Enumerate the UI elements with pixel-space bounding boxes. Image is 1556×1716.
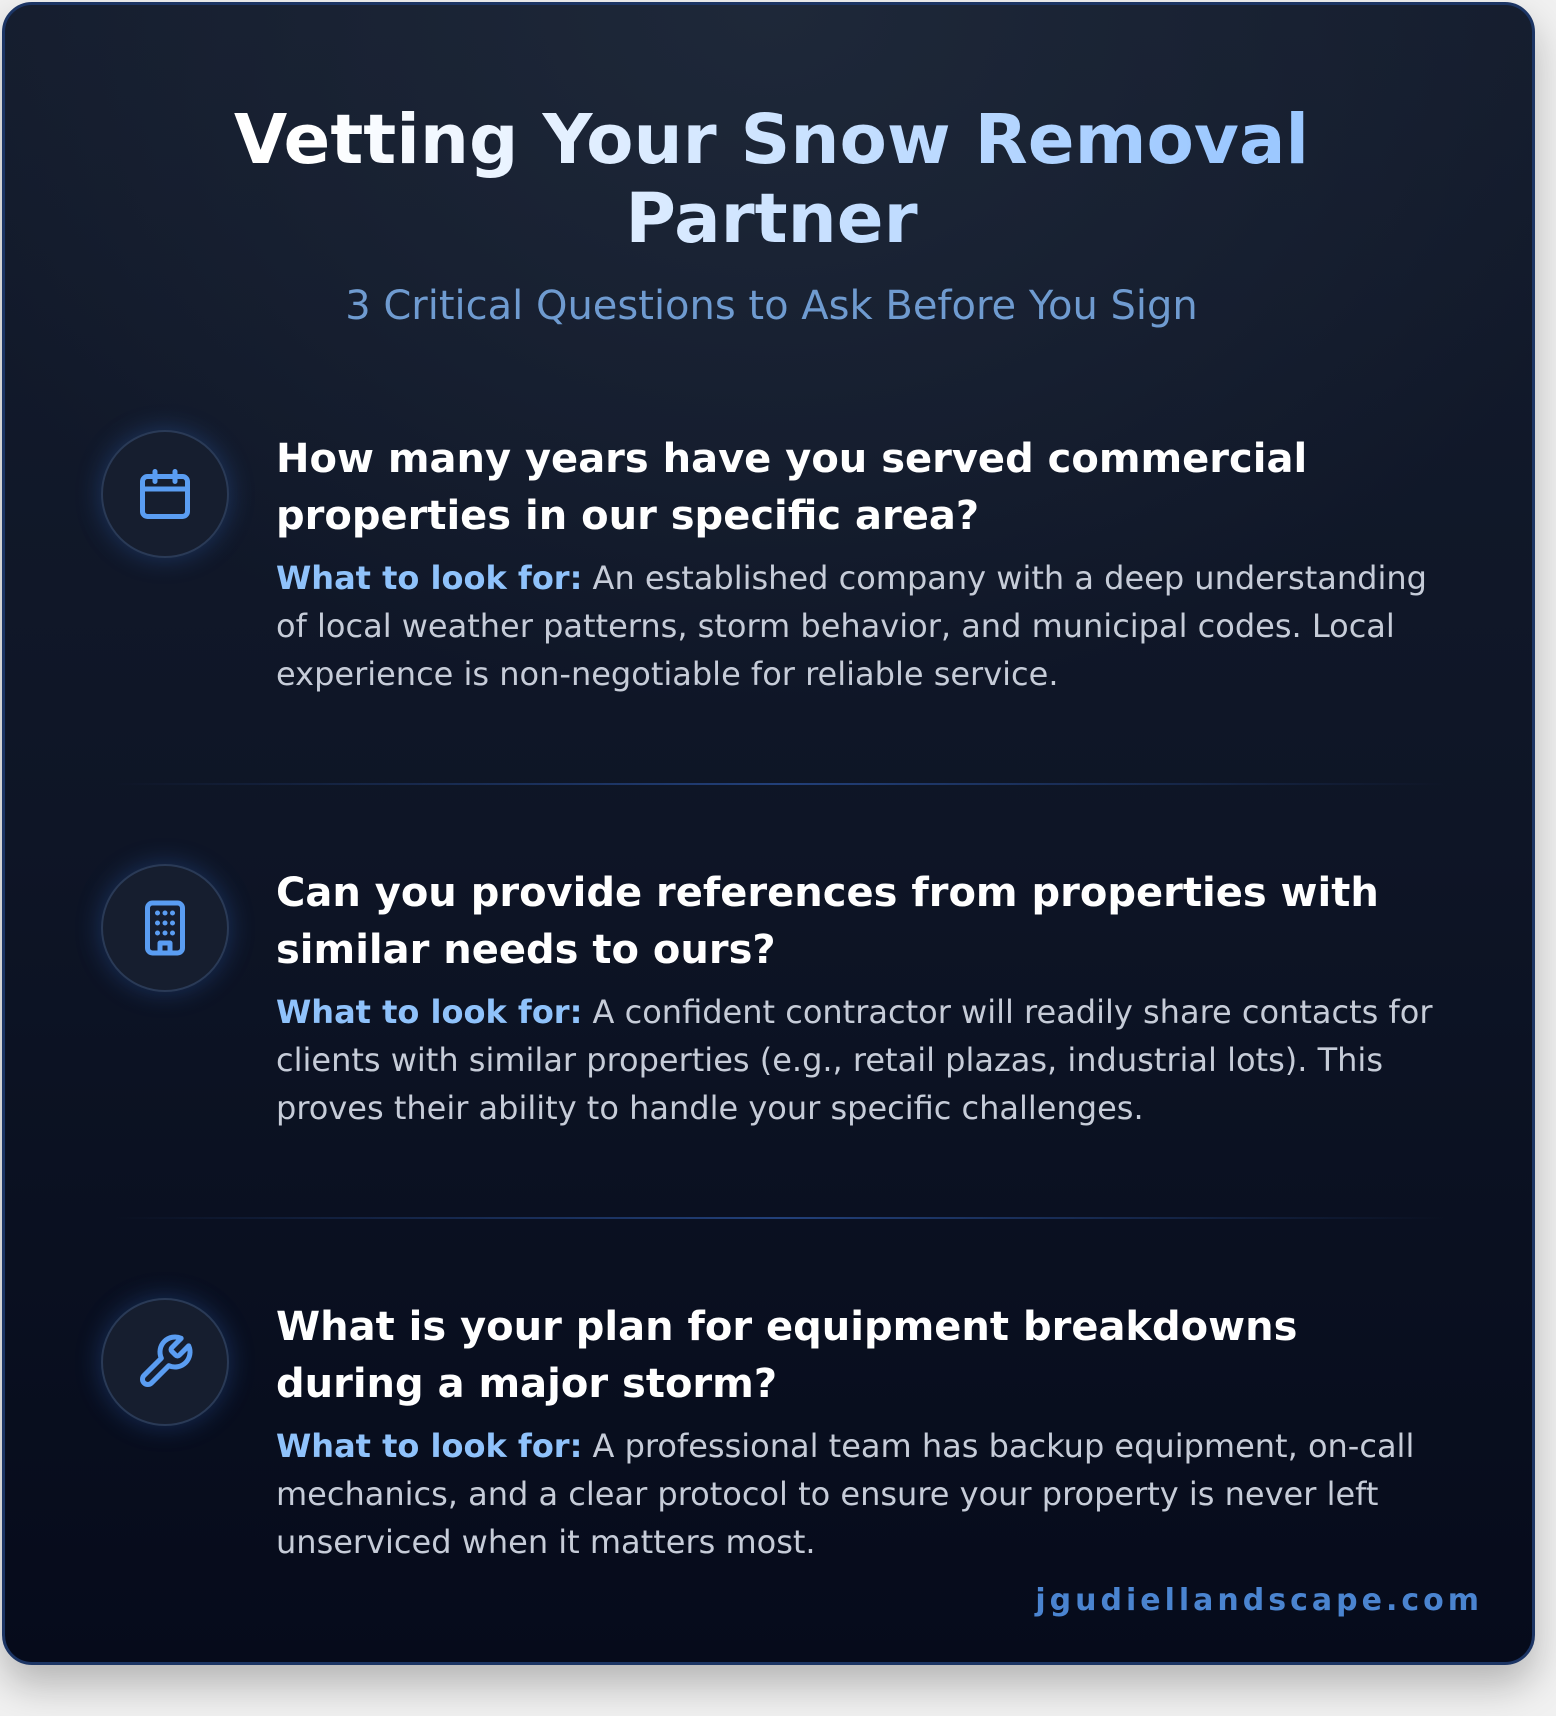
- icon: building: [101, 864, 229, 992]
- question 2: Can you provide references from properties with similar needs to ours?: [276, 870, 1379, 973]
- footer url: jgudiellandscape.com: [1035, 1583, 1483, 1618]
- question 2: What to look for: A confident contractor will readily share contacts for clients with similar properties (e.g., retail plazas, industrial lots). This proves their ability to handle your specific challenges.: [276, 993, 1432, 1127]
- icon: wrench: [101, 1298, 229, 1426]
- question 1: [276, 436, 1427, 693]
- title: Vetting Your Snow Removal: [234, 100, 1309, 180]
- question 3: [276, 1304, 1414, 1561]
- question 1: What to look for: An established company with a deep understanding of local weather patterns, storm behavior, and municipal codes. Local experience is non-negotiable for reliable service.: [276, 559, 1427, 693]
- title: Partner: [625, 179, 918, 259]
- title: [5, 101, 1538, 259]
- question 3: What to look for: A professional team has backup equipment, on-call mechanics, and a clear protocol to ensure your property is never left unserviced when it matters most.: [276, 1427, 1414, 1561]
- question 2: [276, 870, 1433, 1127]
- question 1: How many years have you served commercial properties in our specific area?: [276, 436, 1307, 539]
- subtitle: 3 Critical Questions to Ask Before You Sign: [345, 283, 1198, 329]
- question 3: What is your plan for equipment breakdowns during a major storm?: [276, 1304, 1297, 1407]
- icon: calendar: [101, 430, 229, 558]
